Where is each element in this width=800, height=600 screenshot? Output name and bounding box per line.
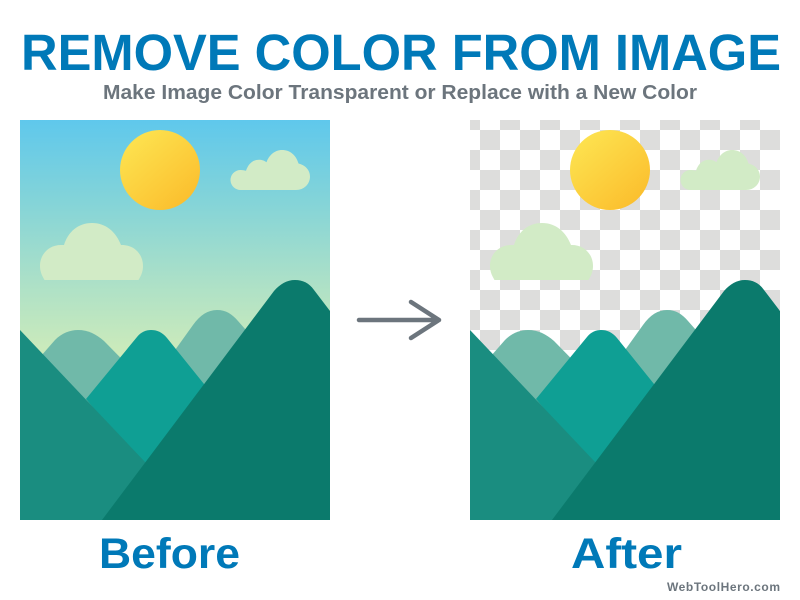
subtitle: Make Image Color Transparent or Replace with a New Color xyxy=(103,82,697,104)
hill: back left xyxy=(470,330,610,430)
hill: front left xyxy=(20,330,200,520)
hill: front right dark xyxy=(102,280,330,520)
watermark: WebToolHero.com xyxy=(667,580,780,594)
icon: small cloud xyxy=(230,150,310,190)
label: after: After xyxy=(571,530,682,578)
icon: small cloud xyxy=(680,150,760,190)
icon: large cloud xyxy=(40,223,143,280)
panel: after image xyxy=(470,120,780,520)
icon: large cloud xyxy=(490,223,593,280)
hill: back right xyxy=(600,310,740,420)
sky background xyxy=(20,120,330,520)
icon: sun xyxy=(570,130,650,210)
hill: front left xyxy=(470,330,650,520)
hill: front right dark xyxy=(552,280,780,520)
arrow xyxy=(359,302,439,338)
icon: sun xyxy=(120,130,200,210)
hill: middle teal xyxy=(86,330,240,470)
hill: middle teal xyxy=(536,330,690,470)
transparency checkerboard xyxy=(470,120,780,360)
hill: back right xyxy=(150,310,290,420)
hill: back left xyxy=(20,330,160,430)
label: before: Before xyxy=(99,530,240,578)
panel: before image xyxy=(20,120,330,520)
title: REMOVE COLOR FROM IMAGE xyxy=(21,24,781,81)
